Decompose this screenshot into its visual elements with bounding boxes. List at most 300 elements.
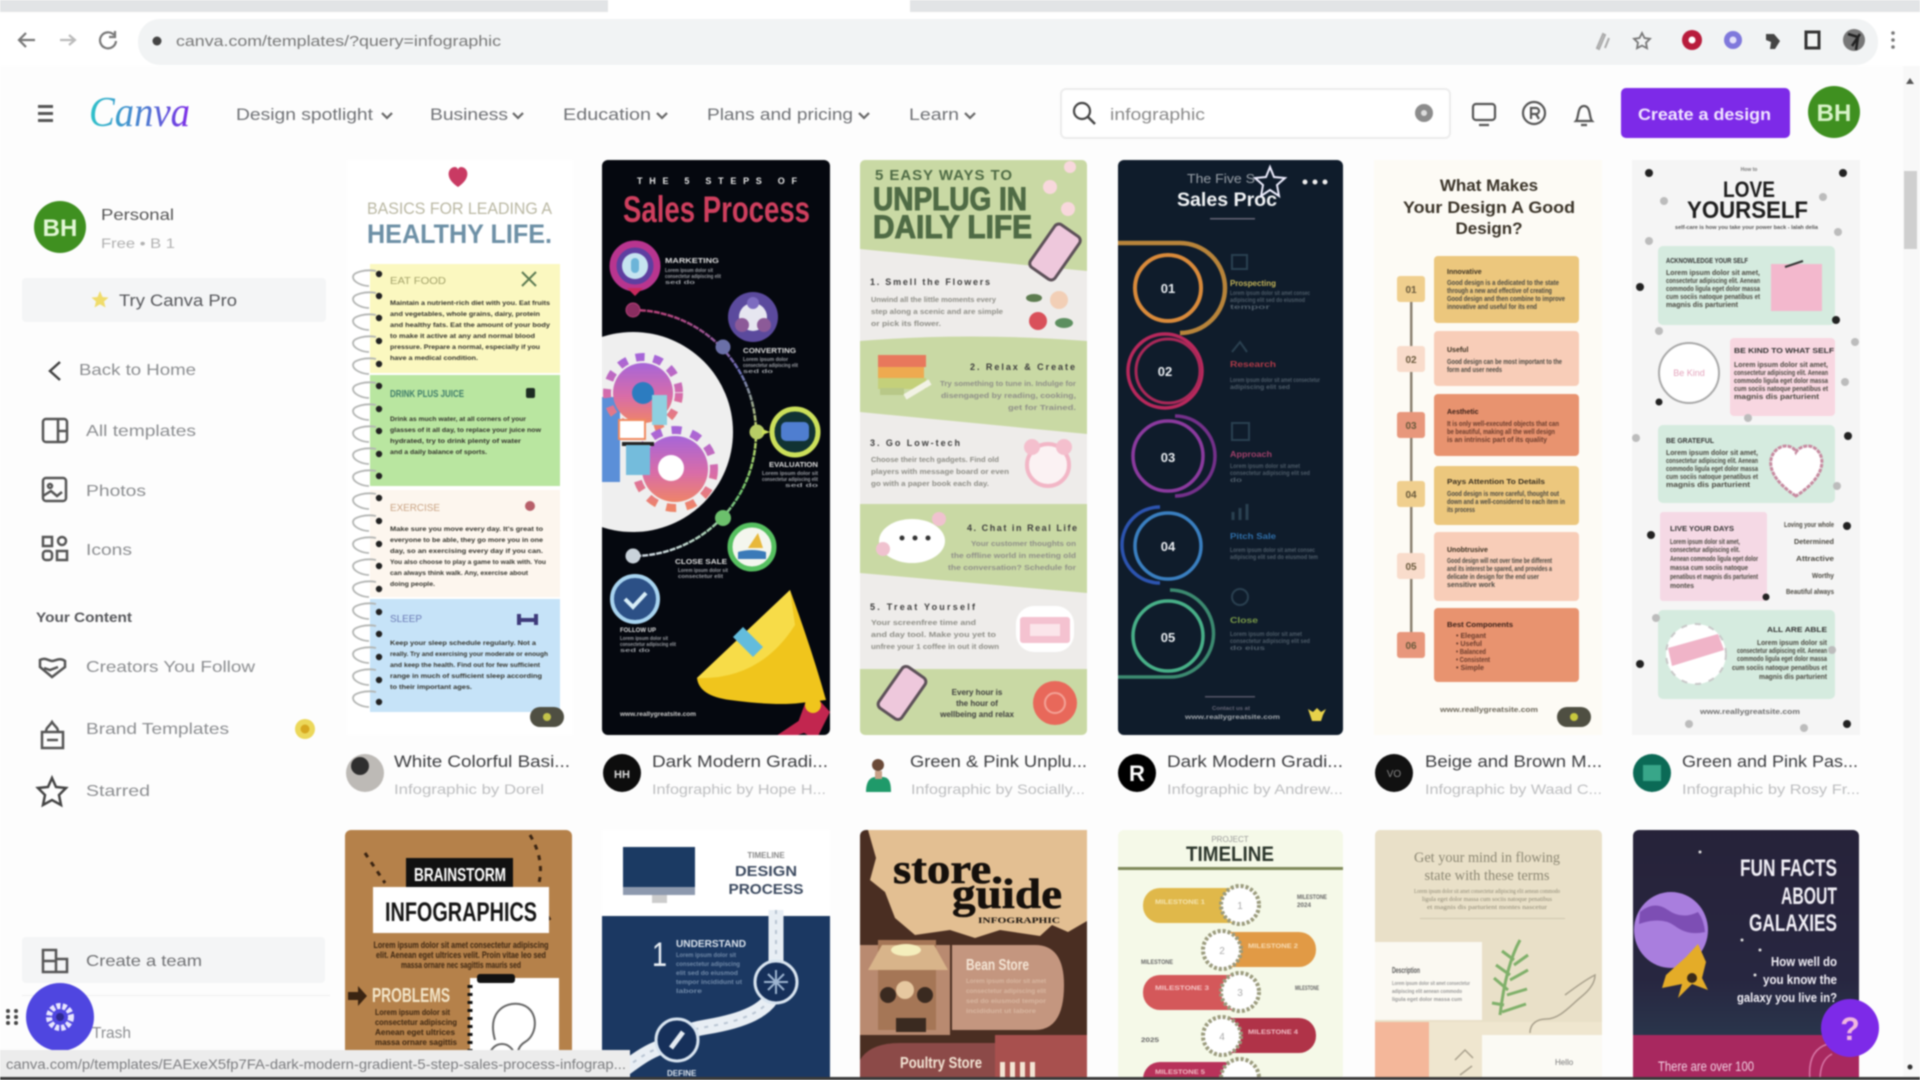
navy panel [602,916,830,1080]
white note: ligula eget dolor massa cum [1392,997,1463,1003]
green panel: glasses of it all day, to replace your juice now [390,428,541,434]
intro text: massa ornare nec sagittis mauris sed [401,960,521,970]
box 3 aesthetic: be beautiful, making all the well design [1447,429,1555,436]
panel d: consectetur adipiscing elit. [1670,547,1740,554]
panel d: Worthy [1812,573,1834,580]
panel c: consectetur adipiscing elit. Aenean [1666,458,1758,465]
bean store panel: incididunt ut labore [966,1009,1037,1015]
step 2: Try something to tune in. Indulge for [940,381,1076,388]
box 5: Good design will not over time be different [1447,558,1552,565]
template card: love yourself [1632,160,1860,735]
step labels: MARKETING [665,258,720,265]
search box: infographic [1110,105,1206,124]
step labels: sed do [620,648,650,654]
title [623,176,810,224]
cream panel: EXERCISE [390,503,440,514]
panel d: penatibus et magnis dis parturient [1670,574,1759,581]
scattered sparkles [1632,169,1859,732]
swirl decoration [1810,1044,1832,1080]
panel e: ALL ARE ABLE [1767,627,1827,634]
caption 4 [1118,752,1343,797]
sidebar links: Creators You Follow [86,659,256,676]
cream panel: doing people. [390,582,435,588]
caption 3: Infographic by Socially... [911,781,1085,797]
box 5: and its interest be spared, and provides a [1447,566,1552,573]
step ring 2: 02 [1158,364,1172,379]
template card: brainstorm infographics [344,829,573,1052]
panel b: commodo ligula eget dolor massa [1734,378,1828,385]
template card: five step sales process dark [1118,160,1343,735]
doodle line decoration [1455,975,1595,1075]
title: Your Design A Good [1403,198,1575,217]
timeline pill 2: MILESTONE [1141,960,1173,966]
green panel: DRINK PLUS JUICE [390,389,464,400]
step 1: consectetur adipiscing [676,962,740,968]
footer and badge: www.reallygreatsite.com [1439,707,1538,714]
step labels: consectetur elit [678,574,723,580]
panel b: cum sociis natoque penatibus et [1734,386,1829,393]
left sidebar [6,201,330,1051]
caption 4: Infographic by Andrew... [1167,781,1343,797]
cream panel: Make sure you move every day. It's great to [390,527,543,533]
bean store panel: Bean Store [966,957,1029,974]
panel d: Loving your whole [1784,522,1834,529]
panel d: montes [1670,583,1694,590]
heading: DESIGN [735,863,797,880]
title: UNPLUG IN [873,181,1027,217]
heading text: et magnis dis parturient montes nascetur [1427,905,1547,911]
white title label [373,887,549,933]
try canva pro button: Try Canva Pro [119,291,237,310]
panel c: commodo ligula eget dolor massa [1666,466,1758,473]
sidebar links: Icons [86,542,132,559]
box 2 useful: form and user needs [1447,367,1502,374]
white note: adipiscing elit aenean commodo [1392,989,1462,995]
step 1: Lorem ipsum dolor sit [676,953,736,959]
yellow panel: and vegetables, whole grains, dairy, protein [390,312,540,318]
canva top navigation [38,86,1860,138]
heading [1177,171,1277,220]
box 3 aesthetic: It is only well-executed objects that can [1447,421,1559,428]
box 4: down and a well-considered to each item in [1447,499,1565,506]
caption 1 [346,752,570,797]
panel a: commodo ligula eget dolor massa [1666,286,1760,293]
help button [1821,999,1879,1057]
notebook with question marks [466,973,560,1051]
footer with phone and badge [876,664,1077,725]
step 5: Your screenfree time and [871,620,976,627]
panel e [1658,610,1835,699]
step 2: 2. Relax & Create [970,362,1075,372]
timeline: 04 [1405,490,1417,501]
white title label: INFOGRAPHICS [385,897,537,927]
heading text: Lorem ipsum dolor sit amet consectetur adipiscing elit aenean commodo [1414,889,1560,895]
template card: store guide [860,830,1087,1080]
box 6: • Elegant [1456,633,1487,640]
panel a: Lorem ipsum dolor sit amet, [1666,270,1760,277]
step details: Lorem ipsum dolor sit amet [1230,464,1300,470]
yellow panel: pressure. Prepare a normal, especially if you [390,345,540,351]
white note: Lorem ipsum dolor sit amet consectetur [1392,981,1470,987]
step details [1230,255,1321,652]
step 4: 4. Chat in Real Life [967,523,1077,533]
panel d: Aenean commodo ligula eget dolor [1670,556,1758,563]
cream panel: everyone to be able, they go more you in one [390,538,544,544]
account block [34,201,175,253]
heading: Sales Proc [1177,190,1277,211]
step 3: Choose their tech gadgets. Find old [871,457,999,464]
timeline pill 1: MILESTONE [1297,895,1327,901]
step 3 [870,438,1072,488]
template card: unplug in daily life [860,160,1087,735]
nav links: Learn [909,105,959,124]
step labels: Lorem ipsum dolor sit [762,471,818,477]
step ring 5 [1118,590,1214,677]
box 6: • Balanced [1456,649,1486,656]
timeline pill 3: MILESTONE [1295,986,1319,992]
heading text: ligula eget dolor massa cum sociis natoque penatibus [1422,897,1553,903]
blue panel: range in much of sufficient sleep according [390,674,542,680]
heading: PROCESS [728,881,804,898]
problems section: massa ornare sagittis [375,1038,458,1047]
card title [367,199,553,249]
caption 2: HH [614,769,630,781]
footer with phone and badge: Every hour is [952,688,1003,697]
store guide title: store. [893,847,1003,893]
yellow panel: and healthy fats. Eat the amount of your body [390,323,551,329]
caption 5: VO [1387,769,1401,780]
step labels: EVALUATION [769,462,818,469]
sidebar links [36,362,315,805]
connector arc with nodes [626,303,764,564]
timeline pill 3 [1143,973,1319,1011]
nav links [236,105,975,124]
heading: self-care is how you take your power back - lalah delia [1675,225,1818,231]
panel c: BE GRATEFUL [1666,438,1715,445]
sidebar links: Brand Templates [86,721,229,738]
panel a [1658,246,1835,325]
step 4: Your customer thoughts on [971,541,1076,548]
step 1 [652,936,746,995]
step 1: tempor incididunt ut [676,980,742,986]
caption 2: Infographic by Hope H... [652,781,826,797]
timeline pill 4: MILESTONE 4 [1248,1030,1299,1036]
timeline: 06 [1405,641,1417,652]
browser status bar [0,1050,1920,1080]
search box [1061,89,1450,138]
box 5: sensitive work [1447,582,1495,589]
heading: How to [1741,167,1757,173]
cream panel [370,490,560,597]
browser extension icons [1597,29,1895,51]
step 4: the offline world in meeting old [951,553,1076,560]
step 1: 1 [652,936,667,974]
timeline pill 3: MILESTONE 3 [1155,986,1210,992]
nav links: Business [430,105,508,124]
caption 5 [1375,752,1602,797]
winding road [629,909,800,1074]
template card: sales process [600,158,832,736]
favorite star and more dots [1255,167,1328,196]
blue panel: and keep the health. Find out for few sufficient [390,663,540,669]
title [1403,176,1575,238]
create a team button: Create a team [86,953,202,970]
white note: Description [1392,966,1420,975]
intro text: elit. Aenean eget ultrices velit. Proin vitae leo sed [376,950,546,960]
heading [1118,835,1343,870]
template badge [530,707,564,727]
timeline: 02 [1405,355,1417,366]
step details: consectetur adipiscing elit sed [1230,471,1310,477]
poultry store panel [860,1035,1087,1080]
megaphone [697,590,830,742]
step 5: 5. Treat Yourself [870,602,976,612]
title: Sales Process [623,189,810,230]
caption 1: Infographic by Dorel [394,781,544,797]
timeline pill 4 [1141,1017,1316,1055]
box 6: • Consistent [1456,657,1491,664]
card title: HEALTHY LIFE. [367,219,552,249]
footer and badge [1439,707,1591,727]
blue panel [370,599,560,712]
yellow panel: have a medical condition. [390,356,478,362]
panel d: Beautiful always [1786,589,1834,596]
step 1: 1. Smell the Flowers [870,277,990,287]
title: Design? [1455,219,1523,238]
panel d: LIVE YOUR DAYS [1670,526,1734,533]
box 4: its process [1447,507,1475,514]
timeline pill 4: 4 [1219,1032,1225,1043]
problems section: Aenean eget ultrices [375,1028,456,1037]
box 3 aesthetic: Aesthetic [1447,409,1479,416]
caption 4: R [1129,761,1145,786]
template card: fun facts about galaxies [1633,830,1859,1080]
intro text: Lorem ipsum dolor sit amet consectetur adipiscing [374,940,548,950]
address bar url: canva.com/templates/?query=infographic [176,33,502,50]
planet and astronaut [1634,892,1708,998]
browser toolbar [0,12,1920,66]
help button: ? [1840,1011,1860,1047]
poultry store panel: Poultry Store [900,1055,982,1072]
cream panel: day, so an exercising every day if you can. [390,549,543,555]
step details: Prospecting [1230,279,1276,288]
step labels: Lorem ipsum dolor sit [665,268,713,274]
template card: beige plant [1375,830,1602,1080]
card heading: ABOUT [1781,883,1837,910]
panel b: magnis dis parturient [1734,394,1820,401]
timeline pill 1: MILESTONE 1 [1155,900,1206,906]
black label: BRAINSTORM [414,865,506,885]
step labels: Lorem ipsum dolor [743,357,788,363]
caption 1: White Colorful Basi... [394,752,570,771]
dashed route decoration [365,835,550,920]
plant illustration [1492,940,1528,1015]
template card: timeline [1118,830,1343,1080]
panel c: Lorem ipsum dolor sit amet, [1666,450,1758,457]
step 2: DEFINE [667,1069,697,1078]
torn paper heading area [868,830,1087,938]
step 1: UNDERSTAND [676,939,746,950]
heading: TIMELINE [747,851,785,860]
yellow panel: Maintain a nutrient-rich diet with you. Eat fruits [390,301,551,307]
heading [1675,167,1818,231]
notebook spiral [353,270,382,707]
step labels: consectetur adipiscing elit [620,642,676,648]
step 1: Unwind all the little moments every [871,297,996,304]
timeline [1397,276,1425,658]
step labels: FOLLOW UP [620,628,656,634]
phone and hearts [1028,161,1082,282]
heading: TIMELINE [1186,843,1274,866]
caption 5: Infographic by Waad C... [1425,781,1602,797]
step ring 4 [1122,507,1201,583]
title: What Makes [1440,176,1538,195]
box 1 innovative [1434,256,1579,323]
timeline: 03 [1405,421,1417,432]
timeline pill 5 [1143,1059,1259,1080]
footer: www.reallygreatsite.com [1699,709,1800,716]
timeline pill 2: 2 [1219,946,1225,957]
box 1 innovative: through a new and effective of creating [1447,288,1552,295]
box 5 [1434,532,1579,601]
step 1: labore [676,989,703,995]
try canva pro button [22,278,326,322]
step 5 [870,602,1074,652]
step ring 4: 04 [1161,539,1176,554]
profile avatar [1808,86,1860,138]
toolbar navigation icons [19,31,116,48]
step labels: sed do [665,280,695,286]
yellow panel [370,264,560,373]
panel c [1658,425,1835,503]
account block: Personal [101,207,174,224]
cream panel: can always think walk. Any, exercise about [390,571,528,577]
panel a: consectetur adipiscing elit. Aenean [1666,278,1760,285]
caption 5: Beige and Brown M... [1425,752,1602,771]
step details: Lorem ipsum dolor sit amet consec [1230,548,1316,554]
box 6 [1434,608,1579,682]
step details: Research [1230,360,1276,369]
step 4: the conversation? Schedule for [948,565,1076,572]
panel b [1659,338,1835,416]
step 2 [878,355,1076,412]
panel b: consectetur adipiscing elit. Aenean [1734,370,1828,377]
white note [1375,942,1482,1020]
step labels: sed do [785,483,818,489]
timeline: 01 [1405,285,1417,296]
step labels: Lorem ipsum dolor sit [620,636,668,642]
box 2 useful [1434,331,1579,386]
green panel: hydrated, try to drink plenty of water [390,439,522,445]
step 3: players with message board or even [871,469,1009,476]
box 3 aesthetic [1434,394,1579,456]
bean store panel: sed do eiusmod tempor [966,999,1047,1005]
heading: PROJECT [1211,835,1249,844]
step details: adipiscing elit sed do eiusmod tem [1230,555,1318,561]
bean store panel: consectetur adipiscing elit [966,989,1046,995]
footer [1184,696,1326,721]
bottom fact: There are over 100 [1658,1058,1754,1074]
blue panel: to their important ages. [390,685,472,691]
black label [406,858,513,888]
blue panel: really. Try and exercising your moderate or enough [390,652,548,658]
template captions row [346,752,1860,797]
step details: Approach [1230,450,1272,459]
panel b: Lorem ipsum dolor sit amet, [1734,362,1828,369]
blue panel: Keep your sleep schedule regularly. Not a [390,641,537,647]
intro text [374,940,548,970]
step ring 3 [1133,416,1215,496]
card heading: FUN FACTS [1740,855,1837,882]
box 4 [1434,466,1579,525]
panel e: commodo ligula eget dolor massa [1737,656,1827,663]
step labels [620,258,818,654]
box 1 innovative: Good design and then combine to improve [1447,296,1565,303]
create a design button [1621,88,1790,138]
caption 6 [1633,752,1860,797]
create a design button: Create a design [1638,105,1771,124]
problems section [348,985,458,1047]
footer with phone and badge: wellbeing and relax [939,710,1014,719]
blue panel: SLEEP [390,614,422,625]
yellow panel: EAT FOOD [390,276,446,287]
heading: YOURSELF [1687,197,1808,224]
step details: Lorem ipsum dolor sit amet consec [1230,291,1311,297]
title: 5 EASY WAYS TO [875,167,1012,184]
panel d: Attractive [1796,556,1834,563]
timeline pill 3: 3 [1237,988,1243,999]
create a team button [22,937,325,983]
box 1 innovative: Good design is a dedicated to the state [1447,280,1559,287]
peach block and lower panel [1375,1022,1602,1080]
store guide title: guide [952,872,1062,918]
account block: BH [43,215,77,242]
panel c: magnis dis parturient [1666,482,1751,489]
box 3 aesthetic: is an intrinsic part of its quality [1447,437,1547,444]
step ring 1: 01 [1161,281,1175,296]
canva logo: Canva [89,90,190,136]
trash link: Trash [92,1025,131,1042]
heading text: Get your mind in flowing [1414,850,1560,866]
step labels: consectetur adipiscing elit [762,477,818,483]
monitor [623,847,695,903]
timeline pill 5: MILESTONE 5 [1155,1070,1206,1076]
green panel: and a daily balance of sports. [390,450,487,456]
heart icon [449,167,467,187]
card heading: How well do [1771,954,1837,969]
timeline pill 1: 1 [1237,901,1243,912]
sidebar links: Your Content [36,609,132,625]
step details: Lorem ipsum dolor sit amet [1230,632,1302,638]
step ring 1 [1118,243,1225,333]
caption 3: Green & Pink Unplu... [910,752,1087,771]
caption 2 [603,752,828,797]
step 3: go with a paper book each day. [871,481,989,488]
timeline pill 2: MILESTONE 2 [1248,944,1299,950]
step 1: step along a scenic and are simple [871,309,1003,316]
step labels: consectetur adipiscing elit [665,274,721,280]
heading text [1414,850,1565,919]
step 5: unfree your 1 coffee in out it down [871,644,999,651]
step details: adipiscing elit sed do eiusmod [1230,298,1305,304]
cream panel: You also choose to play a game to walk with. You [390,560,546,566]
panel e: magnis dis parturient [1759,674,1828,681]
box 5: Unobtrusive [1447,547,1488,554]
green panel: Drink as much water, at all corners of your [390,417,527,423]
box 2 useful: Useful [1447,347,1468,354]
timeline pill 1 [1143,886,1327,924]
timeline pill 2 [1141,931,1316,969]
